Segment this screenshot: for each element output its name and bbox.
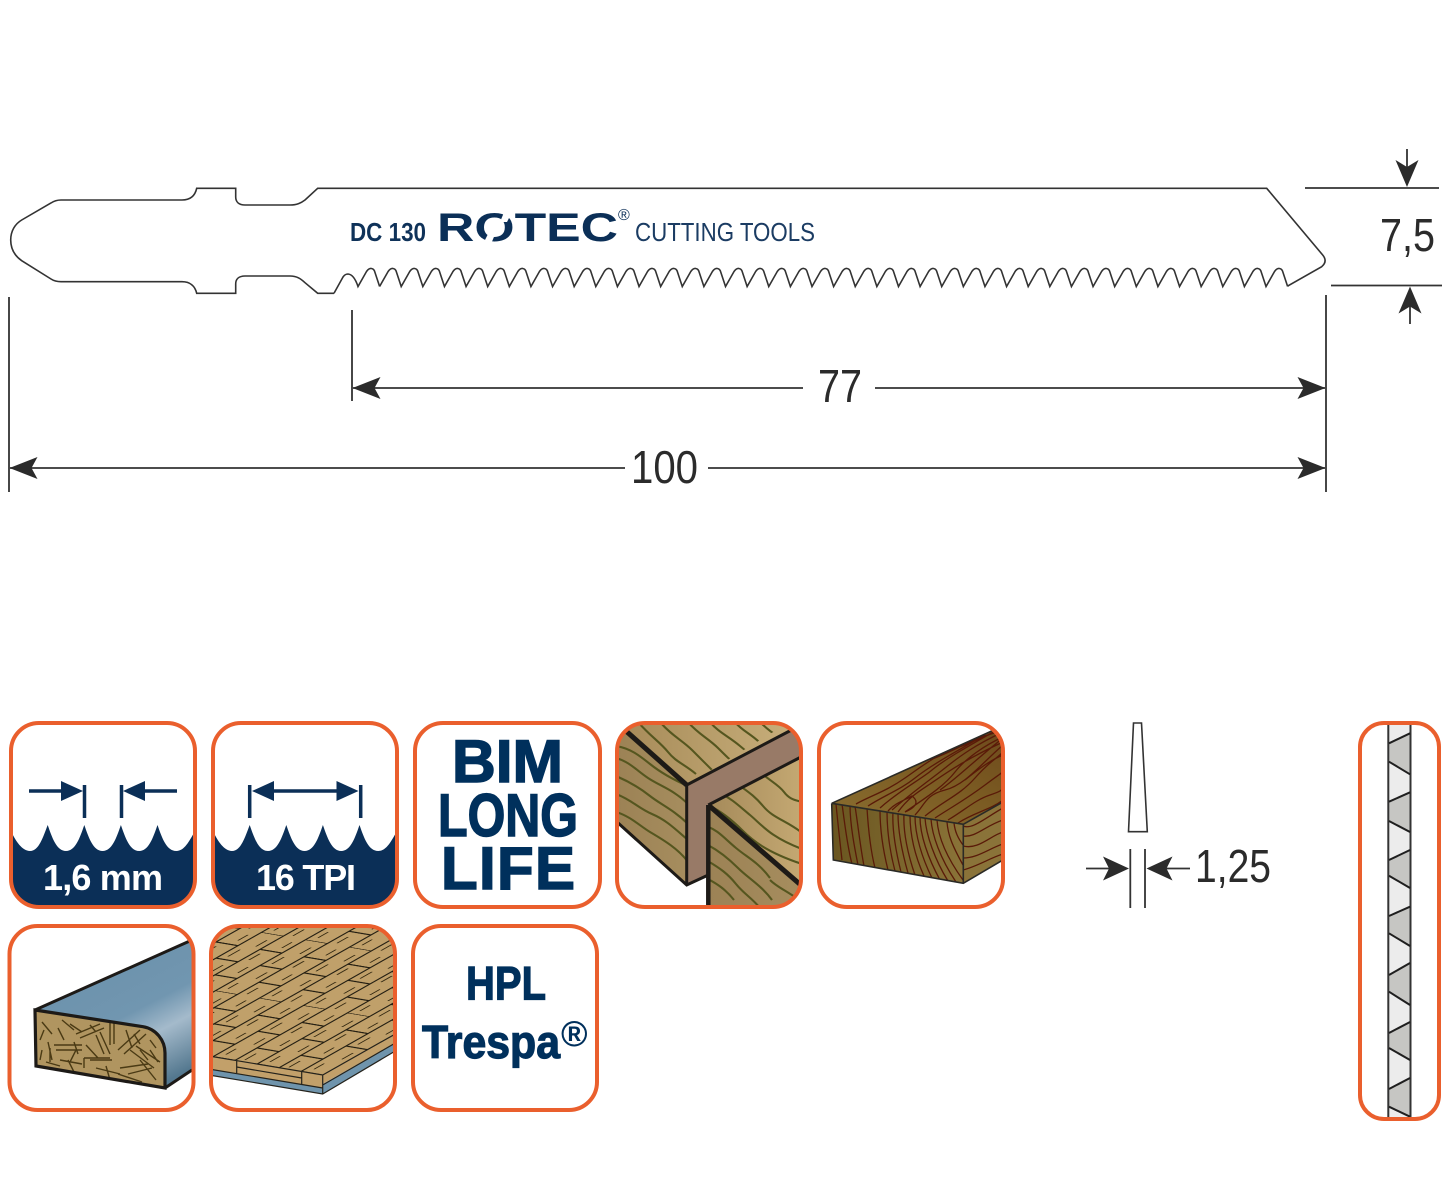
- icon: BIM long life: LONG: [438, 782, 578, 849]
- icon: HPL Trespa: [413, 926, 597, 1110]
- icon: solid wood board: [819, 723, 1003, 907]
- model label: DC 130: [350, 217, 426, 247]
- icon: HPL Trespa: HPL: [466, 956, 546, 1010]
- icon: BIM long life: [415, 723, 600, 907]
- dimension: toothed length 77: [352, 310, 1326, 412]
- icon: 16 teeth per inch: 16 TPI: [256, 857, 356, 898]
- icon: laminated chipboard: [10, 926, 194, 1110]
- dimension: thickness 1,25: [1086, 840, 1271, 908]
- brand tagline: CUTTING TOOLS: [635, 217, 815, 247]
- icon: HPL Trespa: Trespa: [422, 1016, 560, 1068]
- dimension: overall length 100: 100: [631, 441, 698, 493]
- jigsaw blade outline: [11, 188, 1325, 293]
- icon: BIM long life: LIFE: [441, 835, 575, 902]
- brand logo: ®: [618, 207, 630, 224]
- dimension: toothed length 77: 77: [818, 360, 862, 412]
- icon: tooth set side view: [1360, 720, 1439, 1122]
- dimension: blade height 7,5: 7,5: [1380, 209, 1435, 261]
- blade cross-section profile: [1128, 723, 1147, 832]
- icon: tooth pitch 1,6 mm: [9, 723, 197, 912]
- dimension: thickness 1,25: 1,25: [1195, 840, 1271, 892]
- icon: 16 teeth per inch: [211, 723, 399, 912]
- icon: laminated wood corner: [616, 722, 802, 908]
- icon: BIM long life: BIM: [452, 728, 563, 795]
- icon: HPL Trespa: ®: [561, 1013, 588, 1054]
- dimension: blade height 7,5: [1305, 149, 1442, 324]
- icon: tooth pitch 1,6 mm: 1,6 mm: [43, 857, 163, 898]
- brand logo: ROTEC: [437, 206, 618, 250]
- icon: plywood floor panel: [209, 924, 397, 1110]
- dimension: overall length 100: [9, 295, 1326, 493]
